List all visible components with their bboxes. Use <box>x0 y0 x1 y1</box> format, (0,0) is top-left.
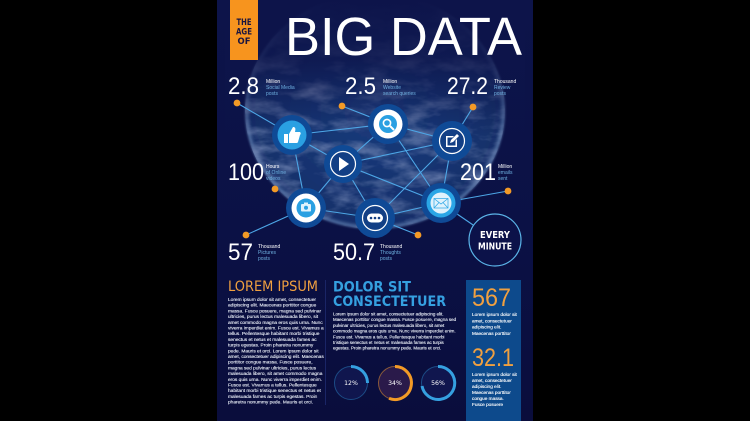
stat: 57 thousand <box>228 239 280 266</box>
text: 567 description: amet, consectetuer <box>472 318 512 323</box>
text: 32.1 description: congue massa. <box>472 396 504 401</box>
every minute badge: EVERY <box>480 230 510 241</box>
left body text: viverra imperdiet enim. Fusce est. Vivamus a <box>228 326 324 332</box>
stat: 57 thousand: Pictures <box>258 250 277 256</box>
stat: 201 million: Million <box>498 164 512 170</box>
middle body text: Fusce est. Vivamus a tellus. Pellentesque habitant morbi <box>333 334 444 339</box>
icon: edit node <box>432 121 472 161</box>
stat: 567: 567 <box>472 284 511 312</box>
orange title tag <box>230 0 258 60</box>
stat: 2.8 million: posts <box>266 91 278 97</box>
stat: 2.8 million <box>228 73 295 100</box>
middle body text: Maecenas porttitor congue massa. Fusce posuere, magna sed <box>333 317 457 322</box>
stat: 201 million: sent <box>498 176 508 182</box>
middle body text <box>333 312 457 351</box>
middle body text: Lorem ipsum dolor sit amet, consectetuer adipiscing elit. <box>333 312 444 316</box>
network connection lines <box>237 103 508 240</box>
middle column <box>333 280 457 400</box>
left body text: porttitor congue massa. Fusce posuere, <box>228 360 313 366</box>
text: 567 description: Lorem ipsum dolor sit <box>472 312 518 317</box>
left body text: pharetra nonummy pede. Mauris et orci. <box>228 400 313 406</box>
stat: 2.5 million <box>345 73 416 100</box>
left body text: eros quis urna. Nunc viverra imperdiet enim. <box>228 377 322 383</box>
stat: 2.8 million: 2.8 <box>228 73 259 100</box>
icon: thumbs up node <box>272 115 312 155</box>
heading: dolor sit consectetuer <box>333 280 446 310</box>
orange title tag: OF <box>238 37 251 47</box>
middle body text: commodo magna eros quis urna. Nunc viverra imperdiet enim. <box>333 329 456 334</box>
stat: 27.2 thousand: Review <box>494 85 511 91</box>
text: 32.1 description: Fusce posuere <box>472 402 503 407</box>
stat: 2.5 million: 2.5 <box>345 73 376 100</box>
heading: dolor sit consectetuer: DOLOR SIT <box>333 280 411 296</box>
text: 32.1 description <box>472 372 518 407</box>
stat: 2.8 million: Social Media <box>266 85 295 91</box>
left body text: malesuada libero, sit amet commodo magna <box>228 371 323 377</box>
stat: 27.2 thousand: posts <box>494 91 506 97</box>
left body text: massa. Fusce posuere, magna sed pulvinar <box>228 308 321 314</box>
stat: 2.5 million: Website <box>383 85 401 91</box>
heading: lorem ipsum: LOREM IPSUM <box>228 279 318 295</box>
left body text: Lorem ipsum dolor sit amet, consectetuer <box>228 297 316 303</box>
icon: camera node <box>286 188 326 228</box>
stat: 201 million: 201 <box>460 159 496 186</box>
left body text: magna sed pulvinar ultricies, purus lectus <box>228 365 317 371</box>
stat: 50.7 thousand: Thousand <box>380 244 402 250</box>
stat: 2.5 million: search queries <box>383 91 416 97</box>
text: 567 description <box>472 312 518 336</box>
middle body text: tristique senectus et netus et malesuada fames ac turpis <box>333 340 445 345</box>
stat: 50.7 thousand: posts <box>380 256 392 262</box>
orange title tag: AGE <box>236 28 252 38</box>
left body text <box>228 297 324 406</box>
donut chart 56%: 56% <box>431 380 445 387</box>
left body text: ultricies, purus lectus malesuada libero, sit <box>228 314 319 320</box>
text: 32.1 description: Lorem ipsum dolor sit <box>472 372 518 377</box>
icon: mail node <box>421 183 461 223</box>
left body text: malesuada fames ac turpis egestas. Proin <box>228 394 318 400</box>
heading: dolor sit consectetuer: CONSECTETUER <box>333 294 446 310</box>
icon: search node <box>368 104 408 144</box>
stat: 57 thousand: Thousand <box>258 244 280 250</box>
donut chart 12%: 12% <box>344 380 358 387</box>
icon: play node <box>324 145 362 183</box>
left body text: turpis egestas. Proin pharetra nonummy <box>228 343 314 349</box>
orange title tag: THE <box>236 18 252 28</box>
left body text: amet, consectetuer adipiscing elit. Maecenas <box>228 354 324 360</box>
connector dots <box>234 100 511 238</box>
left column <box>228 279 324 406</box>
stat: 100 hours: 100 <box>228 159 264 186</box>
middle body text: egestas. Proin pharetra nonummy pede. Mauris et orci. <box>333 346 441 351</box>
every minute badge <box>469 214 521 266</box>
stat: 201 million: emails <box>498 170 513 176</box>
stat: 100 hours: videos <box>266 176 281 182</box>
poster panel <box>217 0 533 421</box>
left body text: tellus. Pellentesque habitant morbi tristique <box>228 331 320 337</box>
left body text: pede. Mauris et orci. Lorem ipsum dolor sit <box>228 348 319 354</box>
left body text: habitant morbi tristique senectus et netus et <box>228 388 321 394</box>
stat: 27.2 thousand: Thousand <box>494 79 516 85</box>
blue stats panel <box>466 280 521 421</box>
text: 32.1 description: amet, consectetuer <box>472 378 512 383</box>
icon: chat node <box>355 198 395 238</box>
stat: 50.7 thousand: Thoughts <box>380 250 401 256</box>
stat: 100 hours: of Online <box>266 170 286 176</box>
middle body text: pulvinar ultricies, purus lectus malesuada libero, sit amet <box>333 323 445 328</box>
stat: 100 hours <box>228 159 286 186</box>
left body text: Fusce est. Vivamus a tellus. Pellentesque <box>228 382 317 388</box>
left body text: amet commodo magna eros quis urna. Nunc <box>228 320 323 326</box>
text: 32.1 description: Maecenas porttitor <box>472 390 511 395</box>
stat: 100 hours: Hours <box>266 164 280 170</box>
stat: 27.2 thousand: 27.2 <box>447 73 488 100</box>
text: 32.1 description: adipiscing elit. <box>472 384 501 389</box>
stat: 57 thousand: 57 <box>228 239 253 266</box>
text: 567 description: Maecenas porttitor <box>472 331 511 336</box>
left body text: senectus et netus et malesuada fames ac <box>228 337 317 343</box>
donut chart 34%: 34% <box>388 380 402 387</box>
title: BIG DATA <box>285 7 522 67</box>
left body text: adipiscing elit. Maecenas porttitor congue <box>228 303 317 309</box>
stat: 32.1: 32.1 <box>472 344 514 372</box>
stat: 2.8 million: Million <box>266 79 280 85</box>
stat: 2.5 million: Million <box>383 79 397 85</box>
globe background <box>244 28 506 230</box>
stat: 27.2 thousand <box>447 73 516 100</box>
stat: 57 thousand: posts <box>258 256 270 262</box>
stat: 50.7 thousand <box>333 239 402 266</box>
every minute badge: MINUTE <box>478 242 512 252</box>
text: 567 description: adipiscing elit. <box>472 325 501 330</box>
stat: 50.7 thousand: 50.7 <box>333 239 375 266</box>
